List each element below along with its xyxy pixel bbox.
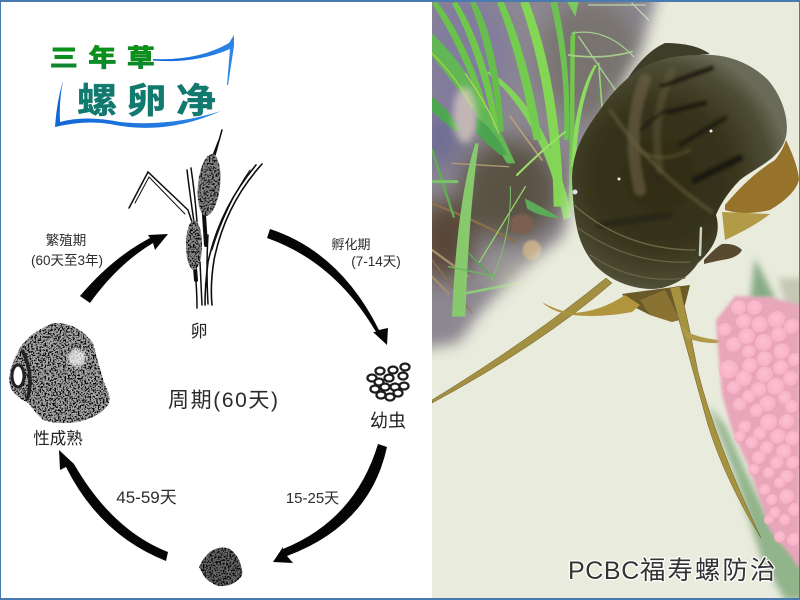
tentacles bbox=[432, 278, 761, 538]
logo: 三年草 螺卵净 bbox=[50, 35, 234, 128]
panel: life cycle bbox=[0, 0, 432, 600]
shell bbox=[572, 55, 787, 289]
label: cycle 60 days: 周期(60天) bbox=[168, 389, 278, 412]
arrow: larva to juvenile bbox=[273, 444, 387, 563]
label: egg stage: 卵 bbox=[190, 322, 208, 341]
photo: pink egg cluster bbox=[716, 296, 800, 570]
operculum and foot bbox=[622, 43, 799, 322]
label: larva stage: 幼虫 bbox=[370, 411, 406, 431]
logo: 三年草 螺卵净: 三年草 bbox=[50, 45, 166, 72]
arrow: adult to egg bbox=[80, 234, 168, 303]
label: incubation period: 孵化期 bbox=[331, 237, 371, 252]
label: 15-25 days: 15-25天 bbox=[286, 490, 339, 507]
label: incubation period: (7-14天) bbox=[351, 254, 401, 269]
icon: adult snail bbox=[9, 323, 109, 423]
panel: snail photo bbox=[415, 0, 800, 600]
label: 45-59 days: 45-59天 bbox=[116, 488, 177, 507]
grass blades bbox=[432, 2, 597, 317]
photo: snail bbox=[432, 43, 799, 538]
photo: rice seedlings and soil bbox=[432, 2, 665, 356]
logo: 三年草 螺卵净: 螺卵净 bbox=[77, 81, 225, 120]
icon: juvenile snail bbox=[199, 548, 242, 586]
label: breeding period: 繁殖期 bbox=[46, 232, 86, 248]
label: sexual maturity: 性成熟 bbox=[33, 429, 83, 448]
arrow: egg to larva bbox=[267, 229, 388, 345]
label: incubation period bbox=[331, 237, 401, 269]
icon: rice plant with eggs bbox=[129, 130, 262, 308]
shell bands bbox=[600, 68, 740, 225]
icon: larvae bbox=[368, 364, 410, 400]
label: breeding period: (60天至3年) bbox=[31, 253, 103, 268]
photo: leaf behind eggs bbox=[708, 258, 800, 600]
label: breeding period bbox=[31, 232, 103, 268]
caption: PCBC 福寿螺防治: PCBC福寿螺防治 bbox=[568, 557, 777, 585]
arrow: juvenile to adult bbox=[59, 450, 168, 561]
